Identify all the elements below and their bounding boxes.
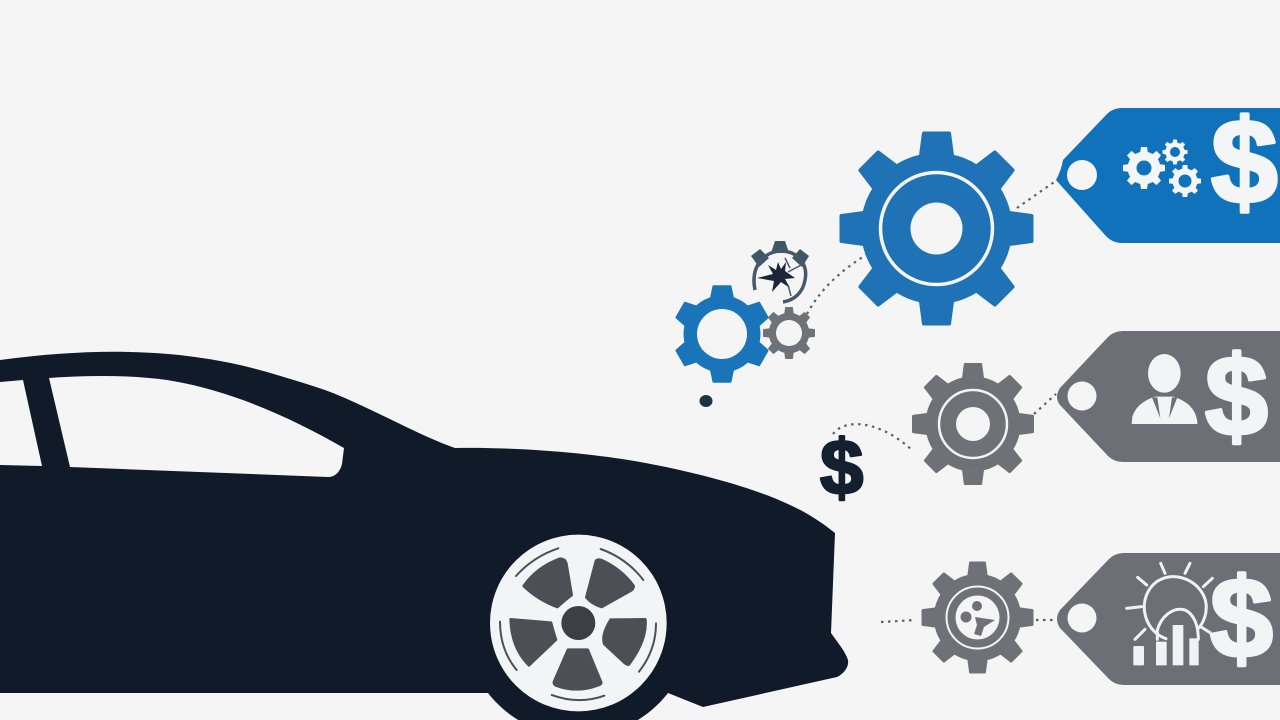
front wheel arch — [464, 509, 692, 720]
wheel hub — [561, 606, 595, 640]
grey gear: network — [923, 563, 1032, 672]
dollar sign: $ — [1205, 333, 1268, 459]
broken dark gear — [751, 241, 809, 302]
price tag: grey person — [1057, 331, 1280, 462]
price tag: blue — [1056, 95, 1280, 243]
wheel rim lines — [500, 548, 656, 700]
car body — [0, 352, 848, 707]
rear window — [0, 380, 42, 466]
icon: sun and bar chart — [1127, 563, 1212, 665]
side window — [49, 376, 344, 477]
tag hole — [1068, 382, 1096, 410]
small blue gear — [675, 286, 769, 382]
wheel — [490, 535, 667, 711]
tag hole — [1068, 604, 1096, 632]
grey gear: person — [913, 364, 1033, 484]
car silhouette — [0, 352, 848, 720]
icon: businessperson — [1132, 354, 1197, 424]
dollar sign: $ — [820, 423, 863, 511]
tag hole — [1067, 160, 1097, 190]
dotted connector lines — [807, 180, 1057, 622]
large blue gear — [841, 133, 1032, 324]
small grey gear — [764, 308, 814, 358]
icon: three gears — [1123, 140, 1201, 197]
wheel spokes — [511, 559, 646, 689]
dark dot — [700, 395, 712, 407]
dollar sign: $ — [1210, 555, 1273, 681]
price tag: grey analytics — [1057, 553, 1280, 685]
dollar sign: $ — [1211, 95, 1278, 229]
